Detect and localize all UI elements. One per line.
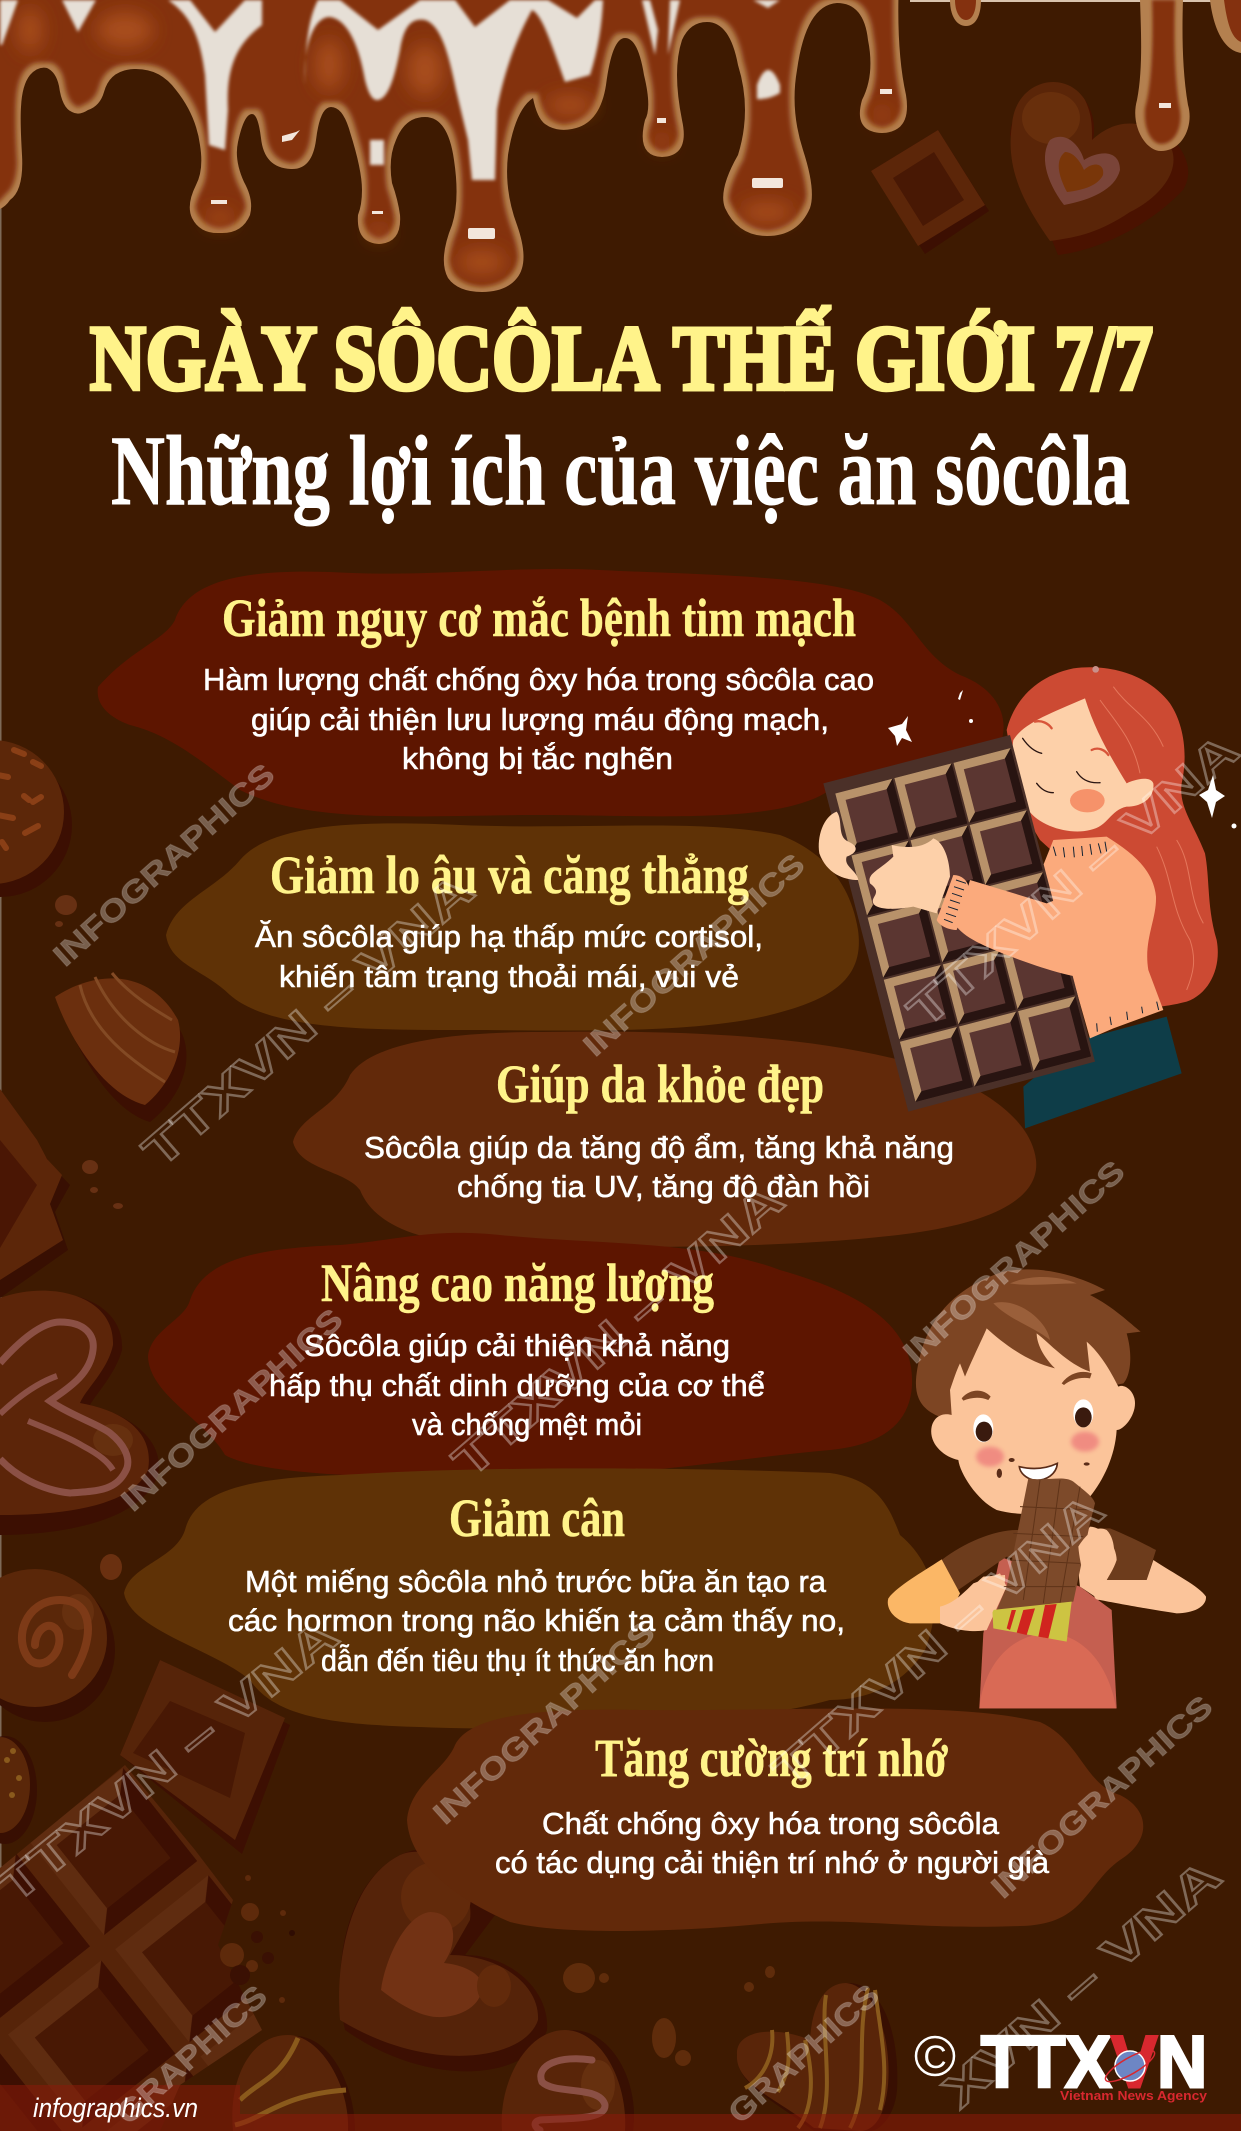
face: [931, 1328, 1135, 1514]
chocolate crumbs: [997, 1458, 1090, 1478]
right arm: [1079, 1527, 1206, 1613]
panel: memory: [407, 1708, 1143, 1931]
body text: [364, 1130, 954, 1204]
decoration: heart chocolate bottom: [339, 1849, 547, 2071]
brows: [962, 1372, 1092, 1401]
decoration: heart top right: [1010, 82, 1188, 255]
hair strands: [1100, 687, 1203, 990]
decoration: bottom band: [0, 2085, 1241, 2131]
panel: skin: [293, 1032, 1036, 1247]
decoration: chocolate bar bottom left: [0, 1765, 262, 2131]
cuff: [937, 875, 969, 930]
body text: Chất chống ôxy hóa trong sôcôla: [542, 1806, 1000, 1841]
watermark: TTXVN: TTXVN – VNA: [132, 863, 484, 1178]
watermark: INFOGRAPHICS: INFOGRAPHICS: [114, 1301, 349, 1518]
panel: heart disease: [98, 569, 1004, 816]
watermark: TTXVN: TTXVN – VNA: [897, 723, 1241, 1038]
body text: khiến tâm trạng thoải mái, vui vẻ: [279, 959, 739, 994]
website label: infographics.vn: [33, 2093, 198, 2123]
drips top right: [910, 0, 1241, 151]
hair clip: [1092, 666, 1099, 673]
decoration: bitten chocolate piece left: [0, 1089, 70, 1298]
body text: [269, 1328, 765, 1442]
watermark: INFOGRAPHICS: INFOGRAPHICS: [984, 1688, 1219, 1905]
body text: dẫn đến tiêu thụ ít thức ăn hơn: [321, 1643, 714, 1678]
watermark: TTXVN: XVN – VNA: [932, 1849, 1231, 2118]
body text: [203, 662, 874, 776]
decoration: crumbs bottom: [563, 1963, 775, 2066]
watermark: INFOGRAPHICS: [46, 756, 1219, 2131]
body text: và chống mệt mỏi: [412, 1407, 642, 1442]
cheeks: [976, 1432, 1099, 1467]
bar: [997, 1478, 1095, 1610]
body text: Hàm lượng chất chống ôxy hóa trong sôcôla cao: [203, 662, 874, 697]
hair: [1007, 667, 1218, 1007]
near hand: [869, 838, 950, 913]
body text: giúp cải thiện lưu lượng máu động mạch,: [251, 702, 829, 737]
chocolate bar: [823, 735, 1095, 1112]
decoration: heart cookie left: [0, 1291, 159, 1535]
heading: Tăng cường trí nhớ: [595, 1728, 948, 1788]
shirt: [942, 1528, 1156, 1593]
heading: Giảm nguy cơ mắc bệnh tim mạch: [222, 588, 856, 648]
watermark: INFOGRAPHICS: INFOGRAPHICS: [426, 1614, 661, 1831]
hair shade: [993, 1277, 1077, 1340]
arm: [957, 880, 1140, 979]
body text: có tác dụng cải thiện trí nhớ ở người già: [495, 1845, 1050, 1880]
decoration: bitten edge crumbs: [220, 1875, 295, 2003]
decoration: small truffle: [0, 1736, 37, 1844]
decoration: striped heart bottom right: [737, 1983, 897, 2131]
skirt: [1023, 1017, 1182, 1128]
body text: Ăn sôcôla giúp hạ thấp mức cortisol,: [255, 919, 763, 954]
highlights: [211, 89, 892, 239]
decoration: crumbs upper left: [55, 895, 123, 1209]
watermark: INFOGRAPHICS: GRAPHICS: [109, 1978, 274, 2131]
hands: [963, 1575, 1005, 1631]
body text: [228, 1564, 845, 1678]
decoration: chocolate piece: [120, 1660, 290, 1854]
decoration: swirl truffle: [0, 1569, 115, 1722]
sparkles: [888, 690, 1236, 828]
logo: TTXVN: [916, 2022, 1208, 2103]
panel: weight loss: [124, 1468, 934, 1729]
cheek: [1070, 789, 1105, 812]
decoration: almond chocolate: [55, 973, 186, 1122]
watermark: INFOGRAPHICS: INFOGRAPHICS: [576, 846, 811, 1063]
body text: Một miếng sôcôla nhỏ trước bữa ăn tạo ra: [245, 1564, 827, 1599]
heading: Giảm cân: [449, 1488, 625, 1548]
inner glows: [18, 8, 891, 274]
left forearm: [940, 1573, 1007, 1631]
white chocolate layer: [0, 0, 780, 180]
globe: [1102, 2045, 1158, 2087]
watermark: TTXVN: TTXVN – VNA: [442, 1173, 794, 1488]
sweater: [1013, 837, 1163, 1038]
eyes and brows: [1023, 721, 1108, 793]
illustration: boy eating chocolate: [888, 1269, 1206, 1708]
face: [1012, 698, 1153, 831]
heading: Giảm lo âu và căng thẳng: [270, 845, 749, 905]
body text: không bị tắc nghẽn: [402, 741, 673, 776]
body text: Sôcôla giúp da tăng độ ẩm, tăng khả năng: [364, 1130, 954, 1165]
far hand: [819, 812, 858, 880]
apron: [979, 1557, 1117, 1708]
heading: Nâng cao năng lượng: [321, 1253, 714, 1313]
cuff ticks: [944, 880, 966, 923]
watermark: INFOGRAPHICS: GRAPHICS: [721, 1977, 886, 2130]
watermark: TTXVN: [0, 723, 1241, 2118]
agency name: Vietnam News Agency: [1060, 2088, 1208, 2103]
panel: energy: [148, 1233, 912, 1478]
watermark: INFOGRAPHICS: INFOGRAPHICS: [46, 756, 281, 973]
body text: các hormon trong não khiến ta cảm thấy no,: [228, 1603, 845, 1638]
mouth: [1019, 1463, 1057, 1480]
body text: chống tia UV, tăng độ đàn hồi: [457, 1169, 870, 1204]
body text: hấp thụ chất dinh dưỡng của cơ thể: [269, 1368, 765, 1403]
body text: Sôcôla giúp cải thiện khả năng: [304, 1328, 730, 1363]
watermark: INFOGRAPHICS: INFOGRAPHICS: [896, 1153, 1131, 1370]
panel: anxiety: [166, 823, 859, 1031]
wrapper: [992, 1602, 1072, 1642]
decoration: dot: [100, 1554, 122, 1580]
left sleeve arm: [888, 1559, 960, 1623]
decoration: S truffle bottom: [502, 2030, 634, 2131]
copyright mark: [916, 2037, 954, 2075]
body text: [495, 1806, 1050, 1880]
decoration: sprinkled cookie: [0, 740, 72, 897]
decoration: small chocolate square top right: [871, 130, 989, 254]
watermark: TTXVN: TTXVN – VNA: [762, 1483, 1114, 1798]
heading: Giúp da khỏe đẹp: [496, 1054, 824, 1114]
copyright mark: C: [923, 2039, 947, 2075]
eyes: [973, 1399, 1093, 1442]
decoration: round striped truffle bottom: [232, 2035, 355, 2131]
melting chocolate drips: [0, 0, 907, 292]
body text: [255, 919, 763, 994]
hair back: [916, 1269, 1141, 1420]
wordmark: TTXVN: [981, 2022, 1207, 2103]
illustration: girl hugging chocolate bar: [819, 666, 1218, 1128]
sweater ticks: [1053, 842, 1159, 1032]
